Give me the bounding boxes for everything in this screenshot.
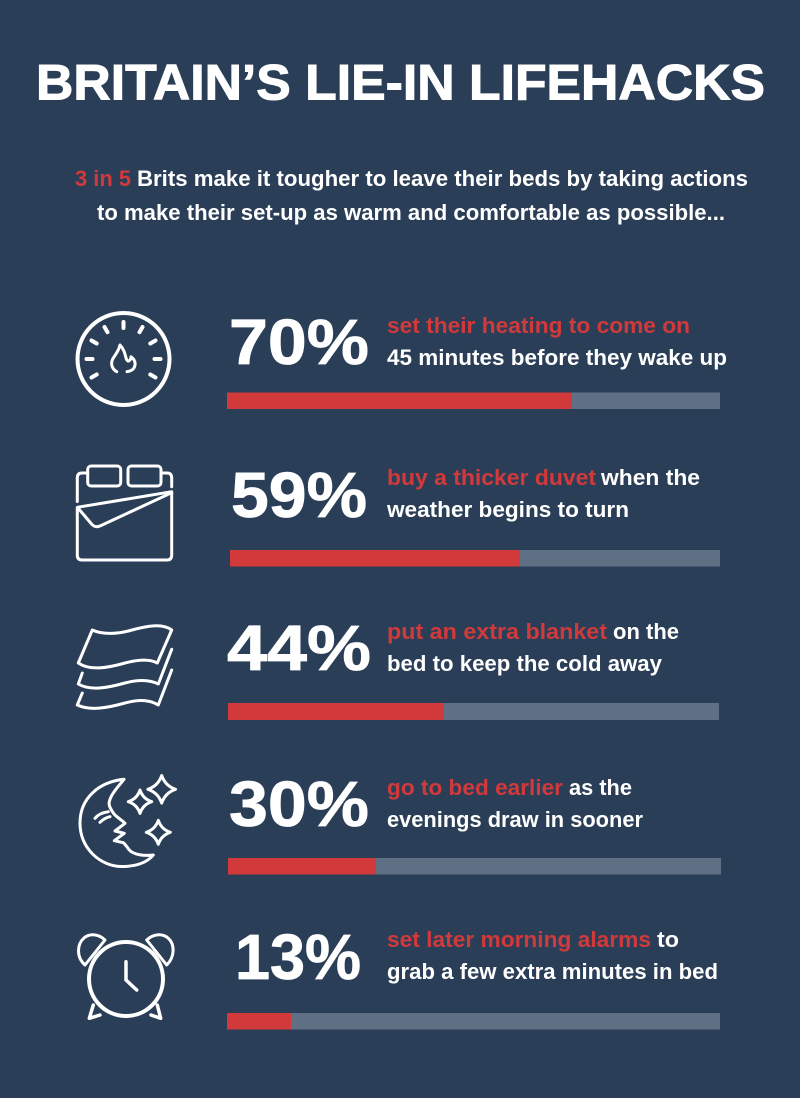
text: alarm: set later morning alarms	[387, 927, 651, 952]
text: alarm: to	[657, 927, 679, 952]
row: early bed	[80, 768, 721, 874]
stat: 13%: 13%	[235, 921, 361, 993]
text: blanket	[387, 619, 679, 676]
text: alarm	[387, 927, 718, 984]
text: duvet: weather begins to turn	[386, 497, 629, 522]
stat: 44%: 44%	[227, 612, 371, 684]
text: blanket: bed to keep the cold away	[387, 651, 662, 676]
text: alarm: grab a few extra minutes in bed	[387, 959, 718, 984]
icon: moon and stars	[80, 776, 176, 866]
icon: stacked blankets	[77, 626, 172, 708]
bar: 13%	[227, 1013, 720, 1030]
stat: 70%: 70%	[229, 306, 369, 378]
row: duvet	[77, 459, 720, 566]
text: heating	[387, 313, 727, 370]
text: early bed: as the	[569, 775, 632, 800]
text: early bed: go to bed earlier	[387, 775, 563, 800]
text: early bed	[387, 775, 643, 832]
intro text: 3 in 5	[75, 166, 131, 191]
intro text: Brits make it tougher to leave their beds by taking actions	[137, 166, 748, 191]
text: heating: set their heating to come on	[387, 313, 690, 338]
icon: alarm clock	[78, 935, 173, 1018]
intro text	[75, 166, 748, 225]
row: heating	[78, 306, 727, 409]
text: heating: 45 minutes before they wake up	[387, 345, 727, 370]
text: duvet: buy a thicker duvet	[387, 465, 597, 490]
text: early bed: evenings draw in sooner	[387, 807, 643, 832]
text: duvet	[386, 465, 700, 522]
text: blanket: put an extra blanket	[387, 619, 608, 644]
row: blanket	[77, 612, 719, 720]
icon: gauge with flame	[78, 313, 170, 405]
bar: 59%	[230, 550, 720, 566]
bar: 30%	[228, 858, 721, 874]
icon: bed with duvet	[77, 466, 172, 560]
title: BRITAIN’S LIE-IN LIFEHACKS	[36, 54, 765, 110]
stat: 30%: 30%	[229, 768, 369, 840]
row: alarm	[78, 921, 720, 1030]
bar: 70%	[227, 392, 720, 409]
bar: 44%	[228, 703, 719, 720]
stat: 59%: 59%	[231, 459, 367, 531]
text: duvet: when the	[600, 465, 700, 490]
intro text: to make their set-up as warm and comfortable as possible...	[97, 200, 725, 225]
text: blanket: on the	[613, 619, 679, 644]
